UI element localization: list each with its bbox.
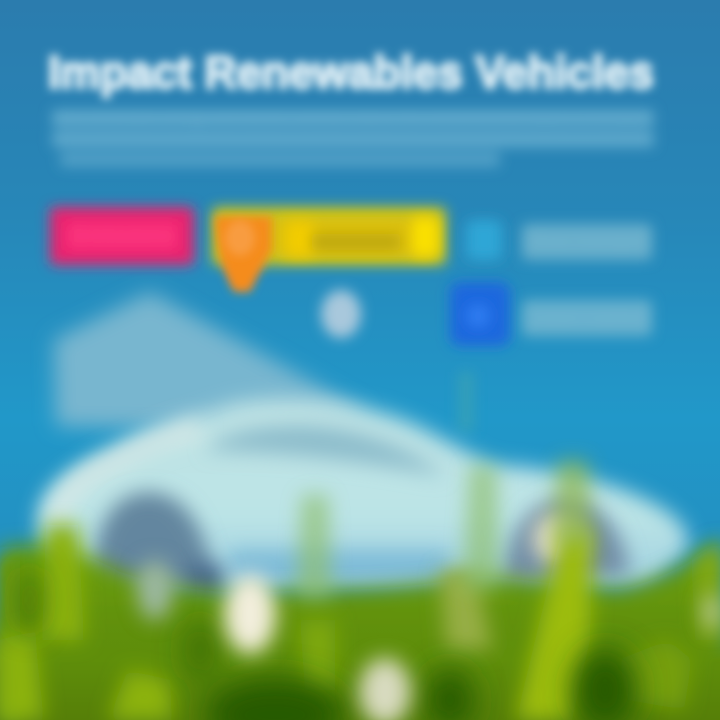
bright blades [0,525,720,720]
rear wheel [502,498,630,585]
pink label bar [50,207,194,265]
legend item: blue [450,282,652,346]
dark patches [18,566,637,720]
pink label bar: Emissions [72,226,174,246]
legend item: blue: Lower carbon [522,310,652,327]
car body [38,399,688,590]
house outline [54,292,368,430]
yellow label bar with orange marker [212,207,446,292]
subtitle text block [52,110,654,167]
yellow label bar with orange marker: Renewable [318,233,394,250]
legend item: teal: Clean transport [522,233,653,250]
rear hub [532,512,580,564]
car windows [205,426,445,476]
grass lower fill without seam [0,600,720,720]
title: Impact Renewables Vehicles [48,46,654,98]
grass base [0,540,720,720]
car highlight [56,428,200,525]
icon: small circle [321,290,361,338]
legend item: teal [466,220,653,260]
car [38,399,688,600]
front wheel [94,492,225,600]
translucent grass tips over car [296,460,592,600]
subtitle text block: How renewable energy and electric vehicles reduce the environmental impact of transport [52,111,652,127]
grass [0,460,720,720]
flowers [137,560,720,720]
car lower body shade [230,550,450,585]
left edge fill [0,560,20,720]
faint pole [458,372,474,432]
